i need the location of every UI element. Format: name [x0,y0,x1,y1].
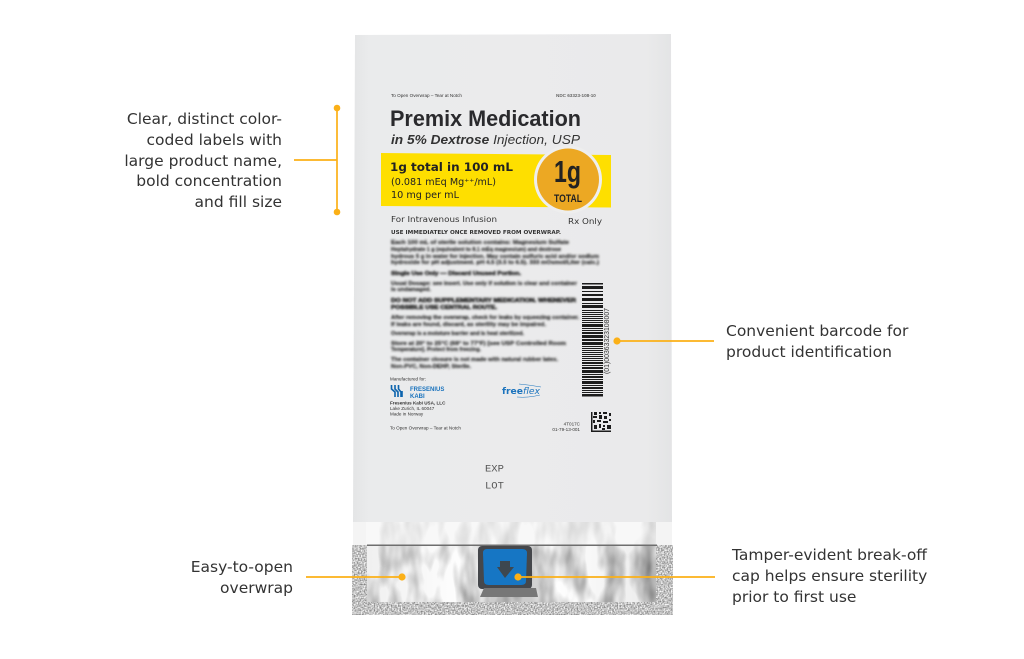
callout text [731,546,927,606]
yellow concentration band: (0.081 mEq Mg⁺⁺/mL) [391,177,496,188]
printed bag label [381,93,611,492]
manufacturer block: Fresenius Kabi USA, LLC [390,400,446,406]
barcode [582,283,611,396]
icon: cap arrow [497,561,514,578]
lower seal band [353,522,672,545]
blurred prescribing text: Each 100 mL of sterile solution contains: Magnesium Sulfate [391,240,569,246]
manufacturer block: 01-79-13-001 [552,427,580,432]
blurred prescribing text: Temperature]. Protect from freezing. [391,347,481,353]
blurred prescribing text: Heptahydrate 1 g (equivalent to 8.1 mEq magnesium) and dextrose [391,247,561,253]
product subtitle: in 5% Dextrose Injection, USP [391,133,581,147]
product name heading: Premix Medication [390,106,581,131]
callout text: bold concentration [136,172,282,190]
blurred prescribing text: Store at 20° to 25°C (68° to 77°F) [see USP Controlled Room [391,341,566,347]
label top notes: To Open Overwrap – Tear at Notch [391,93,462,98]
blurred prescribing text: If leaks are found, discard, as sterility may be impaired. [391,322,546,328]
bag body [353,34,672,522]
blurred prescribing text: After removing the overwrap, check for leaks by squeezing container. [391,315,579,321]
concentration text: 1g total in 100 mL [390,160,514,174]
callout: overwrap [191,558,406,597]
exp and lot print area [485,464,504,492]
total badge: TOTAL [554,193,582,205]
exp and lot print area: EXP [485,464,504,476]
callout text: and fill size [195,193,282,211]
blurred prescribing text: is undamaged. [391,287,431,293]
cap connector [514,573,715,581]
manufacturer block: FRESENIUS [410,387,444,393]
exp and lot print area: LOT [485,480,504,492]
blurred prescribing text: Single Use Only — Discard Unused Portion. [391,271,521,277]
usage warning: USE IMMEDIATELY ONCE REMOVED FROM OVERWRAP. [391,230,561,236]
blurred prescribing text: Usual Dosage: see insert. Use only if solution is clear and container [391,281,578,287]
total badge: 1g [554,154,581,189]
icon: blue break-off cap [478,546,538,597]
callout text [726,322,909,361]
blurred prescribing text [391,240,599,370]
manufacturer block [390,376,581,432]
infusion note: For Intravenous Infusion [391,214,497,224]
overwrap connector [306,573,406,581]
callout text: Tamper-evident break-off [731,546,927,564]
blurred prescribing text: POSSIBLE USE CENTRAL ROUTE. [391,305,497,311]
manufacturer block: Made in Norway [390,412,424,416]
callout: cap [514,546,927,606]
callout text: product identification [726,343,892,361]
callout text [191,558,293,597]
blurred prescribing text: hydrous 5 g in water for injection. May contain sulfuric acid and/or sodium [391,254,599,260]
barcode connector [613,337,714,345]
callout text: Clear, distinct color- [127,110,282,128]
manufacturer block: KABI [410,394,425,400]
blurred prescribing text: Non-PVC, Non-DEHP, Sterile. [391,364,471,370]
freeflex logo: freeflex [502,387,541,397]
bracket connector [294,105,340,215]
manufacturer block: Lake Zurich, IL 60047 [390,406,435,411]
callout text: prior to first use [732,588,856,606]
blurred prescribing text: hydroxide for pH adjustment. pH 4.5 (3.5 to 6.5). 333 mOsmol/Liter (calc.) [391,260,599,266]
label top notes [391,93,596,98]
callout text: overwrap [220,579,293,597]
callout: color-coded labels [124,105,340,215]
barcode number: (01)00363323108007 [604,308,611,374]
callout text: coded labels with [146,131,282,149]
rx only: Rx Only [568,216,602,226]
callout text: large product name, [124,152,282,170]
callout text: Easy-to-open [191,558,293,576]
yellow concentration band: 10 mg per mL [391,190,460,201]
product bag [352,34,673,615]
manufacturer block: To Open Overwrap – Tear at Notch [390,426,461,430]
callout: barcode [613,322,909,361]
manufacturer block: 4T017C [564,422,581,426]
callout text [124,110,282,211]
foil overwrap [352,544,673,615]
total badge [534,146,602,214]
blurred prescribing text: DO NOT ADD SUPPLEMENTARY MEDICATION. WHENEVER [391,298,576,304]
callout text: Convenient barcode for [726,322,909,340]
manufacturer block: Manufactured for: [390,376,426,382]
icon: Fresenius Kabi logo [392,385,402,397]
yellow concentration band [381,146,611,214]
label top notes: NDC 63323-108-10 [556,93,596,98]
callout text: cap helps ensure sterility [732,567,927,585]
blurred prescribing text: Overwrap is a moisture barrier and is heat sterilized. [391,331,524,337]
blurred prescribing text: The container closure is not made with natural rubber latex. [391,357,558,363]
icon: 2D data matrix code [591,412,611,432]
